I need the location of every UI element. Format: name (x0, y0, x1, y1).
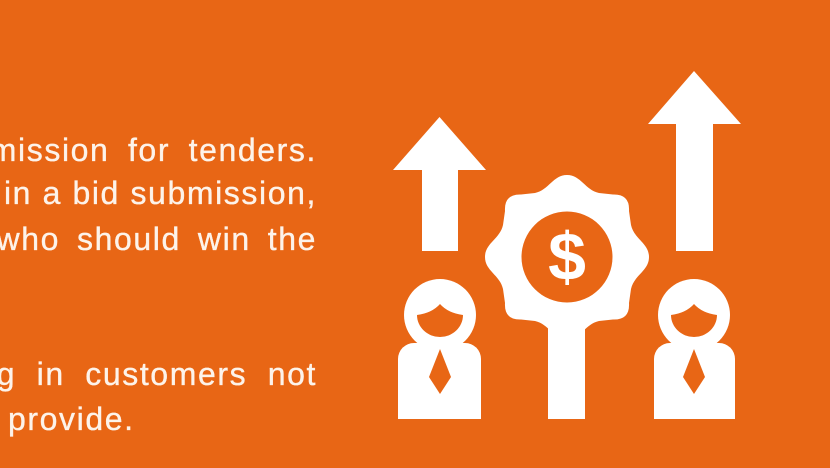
text block: tender description (0, 132, 317, 257)
icon: left person (398, 279, 481, 419)
icon: right arrow (648, 71, 741, 251)
person body (654, 343, 735, 419)
text block: customers note (0, 356, 317, 437)
dollar sign: $ (548, 219, 586, 295)
text line 2: in a bid submission, (4, 175, 317, 211)
text line 5: provide. (8, 401, 135, 437)
person face (671, 304, 717, 337)
person head (404, 279, 476, 351)
person tie (683, 349, 705, 394)
icon: dollar badge on a stick (485, 175, 649, 419)
badge scalloped body (485, 175, 649, 339)
person face (417, 304, 463, 337)
icon: right person (654, 279, 735, 419)
person body (398, 343, 481, 419)
person tie (429, 349, 451, 394)
icon: left arrow (393, 117, 486, 251)
person head (658, 279, 730, 351)
text line 3: who should win the (0, 221, 317, 257)
badge inner circle (522, 212, 612, 302)
text line 4: g in customers not (0, 356, 317, 392)
badge handle (548, 310, 585, 419)
